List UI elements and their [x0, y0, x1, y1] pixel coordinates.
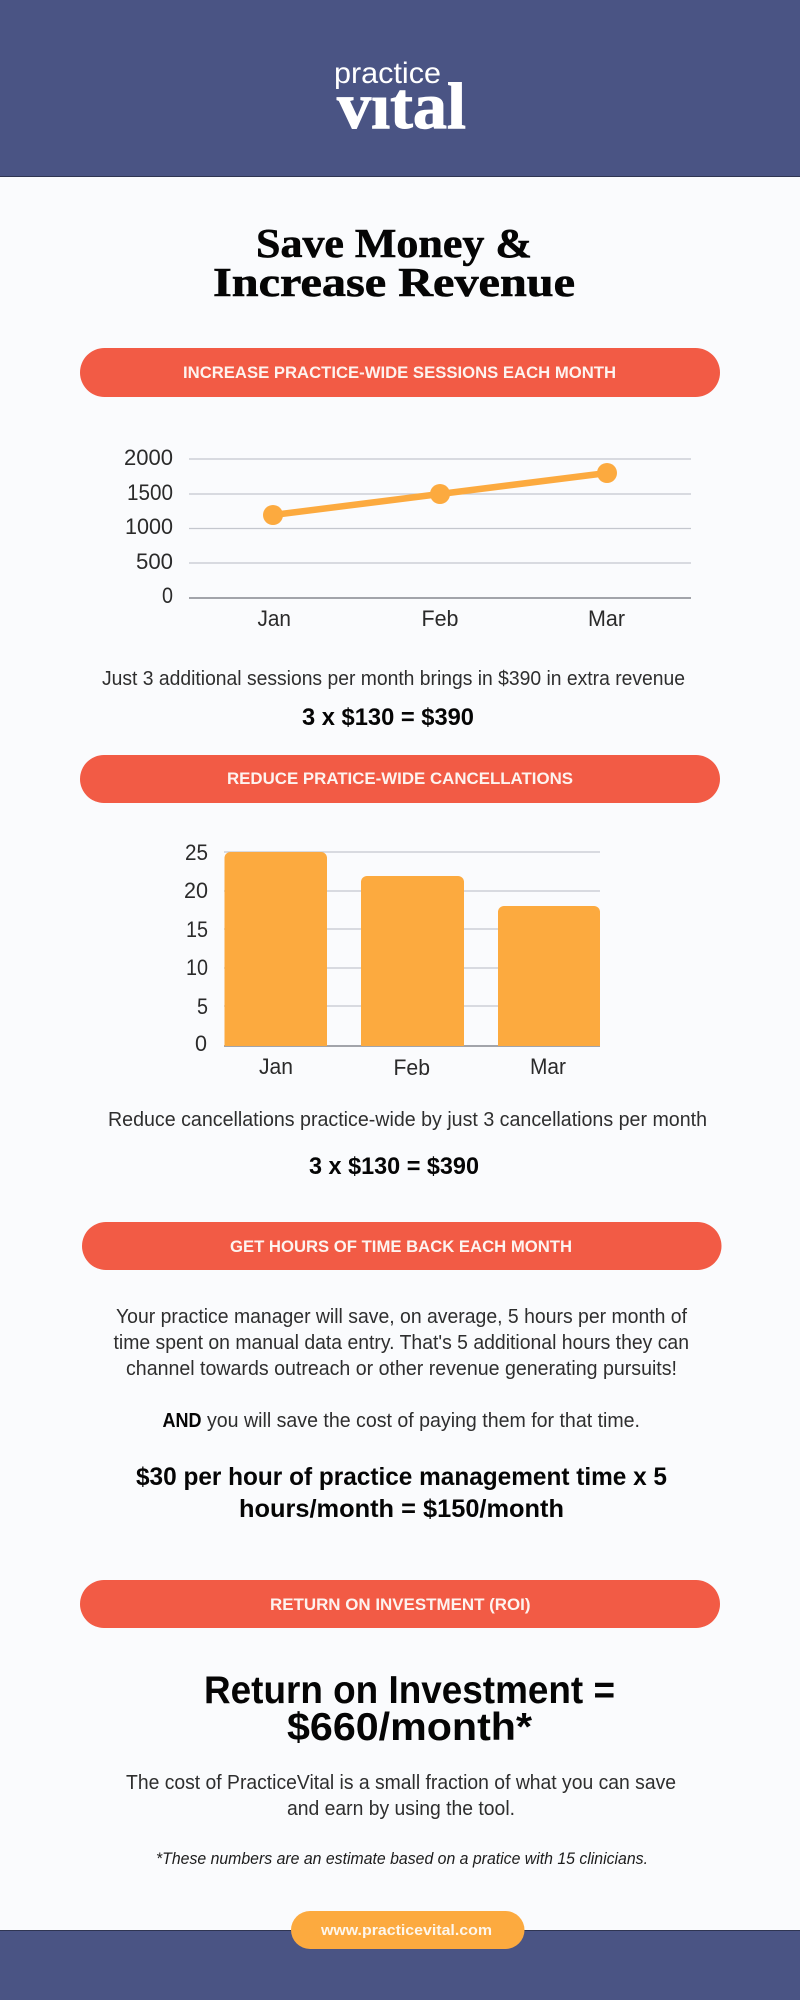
heading: roi amount: $660/month* — [287, 1706, 533, 1749]
section pill: sessions — [80, 348, 720, 397]
text: reduce cancellations: Reduce cancellations practice-wide by just 3 cancellations per month — [108, 1109, 707, 1131]
panel: hours of time back — [82, 1222, 722, 1523]
text: and you will save: you will save the cost of paying them for that time. — [207, 1410, 640, 1432]
website button — [291, 1911, 524, 1949]
bar chart: cancellations per month: 0 — [195, 1031, 207, 1056]
text: practice manager savings: channel towards outreach or other revenue generating pursuits! — [126, 1358, 677, 1380]
section pill: sessions: INCREASE PRACTICE-WIDE SESSIONS EACH MONTH — [183, 363, 616, 382]
line chart: sessions per month: 1500 — [127, 480, 173, 505]
text: additional sessions: Just 3 additional sessions per month brings in $390 in extra revenue — [102, 668, 685, 690]
bar chart: cancellations per month: Mar — [530, 1054, 566, 1079]
section pill: roi — [80, 1580, 720, 1628]
section pill: cancellations: REDUCE PRATICE-WIDE CANCELLATIONS — [227, 769, 573, 788]
panel: increase sessions — [80, 348, 720, 731]
line chart: sessions per month: 2000 — [124, 445, 173, 470]
bar chart: cancellations per month — [184, 840, 600, 1080]
bar chart: cancellations per month: Feb — [394, 1055, 430, 1080]
formula: sessions revenue: 3 x $130 = $390 — [302, 704, 474, 731]
line chart: sessions per month: 500 — [136, 549, 173, 574]
text: cost of practicevital: The cost of PracticeVital is a small fraction of what you can save — [126, 1772, 676, 1794]
line chart: sessions per month: 1000 — [125, 514, 173, 539]
panel: reduce cancellations — [80, 755, 720, 1180]
text: cost of practicevital — [126, 1772, 676, 1820]
text: practice manager savings: Your practice manager will save, on average, 5 hours per month of — [116, 1306, 687, 1328]
heading: roi amount — [204, 1669, 615, 1749]
title — [213, 220, 575, 305]
bar chart: cancellations per month: 5 — [197, 994, 208, 1019]
panel: return on investment — [80, 1580, 720, 1868]
section pill: roi: RETURN ON INVESTMENT (ROI) — [270, 1595, 530, 1614]
website button: www.practicevital.com — [320, 1922, 492, 1939]
bar chart: cancellations per month: 20 — [184, 878, 208, 903]
formula: practice management cost — [136, 1463, 667, 1523]
section pill: hours — [82, 1222, 722, 1270]
bar chart: cancellations per month: 10 — [186, 955, 208, 980]
title: Increase Revenue — [213, 259, 575, 305]
section pill: cancellations — [80, 755, 720, 803]
logo: practice vital: practice — [334, 57, 441, 90]
text: practice manager savings: time spent on manual data entry. That's 5 additional hours they can — [114, 1332, 689, 1354]
title: Save Money & — [256, 220, 532, 266]
section pill: hours: GET HOURS OF TIME BACK EACH MONTH — [230, 1237, 572, 1256]
footer band — [0, 1930, 800, 2000]
formula: practice management cost: hours/month = $150/month — [239, 1495, 564, 1523]
bar chart: cancellations per month: 25 — [185, 840, 208, 865]
logo: practice vital: vital — [337, 70, 466, 143]
text: practice manager savings — [114, 1306, 689, 1380]
formula: practice management cost: $30 per hour of practice management time x 5 — [136, 1463, 667, 1491]
line chart: sessions per month: Jan — [258, 606, 291, 631]
line chart: sessions per month — [124, 445, 691, 631]
text: cost of practicevital: and earn by using the tool. — [287, 1798, 515, 1820]
line chart: sessions per month: Feb — [422, 606, 458, 631]
text: and you will save: AND — [162, 1410, 202, 1432]
bar chart: cancellations per month: 15 — [186, 917, 208, 942]
footnote: *These numbers are an estimate based on a pratice with 15 clinicians. — [156, 1850, 648, 1868]
formula: cancellations revenue: 3 x $130 = $390 — [309, 1153, 479, 1180]
line chart: sessions per month: 0 — [162, 583, 173, 608]
heading: roi amount: Return on Investment = — [204, 1669, 615, 1712]
line chart: sessions per month: Mar — [588, 606, 625, 631]
header band with logo — [0, 0, 800, 177]
bar chart: cancellations per month: Jan — [259, 1054, 293, 1079]
